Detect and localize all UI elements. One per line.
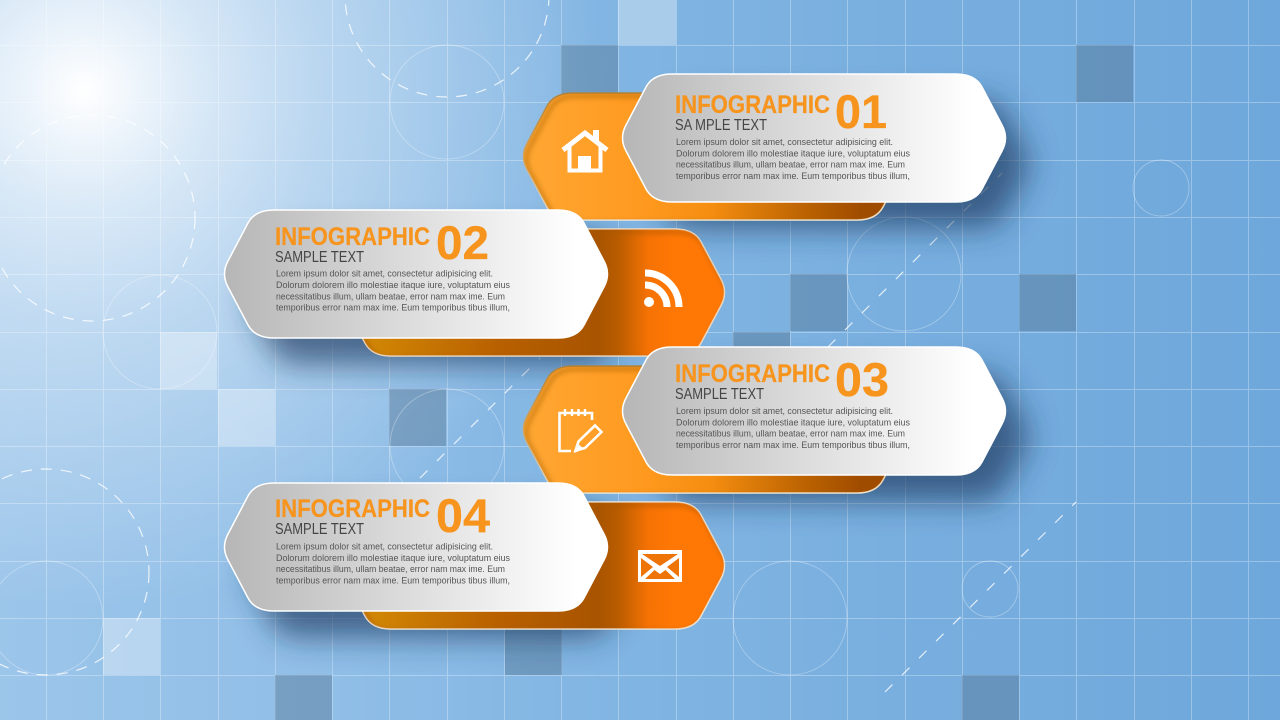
- panel: step 02: [224, 210, 728, 359]
- number 02: 02: [436, 216, 489, 269]
- orange tab 01: [524, 93, 910, 223]
- body text 01: necessitatibus illum, ullam beatae, error nam max ime. Eum: [676, 159, 905, 170]
- panel: step 03: [524, 347, 1006, 496]
- body text 03: temporibus error nam max ime. Eum temporibus tibus illum,: [676, 439, 910, 450]
- body text 03: necessitatibus illum, ullam beatae, error nam max ime. Eum: [676, 428, 905, 439]
- body text 02: Lorem ipsum dolor sit amet, consectetur adipisicing elit.: [276, 268, 493, 279]
- subtitle 04: SAMPLE TEXT: [275, 521, 364, 538]
- body text 02: temporibus error nam max ime. Eum temporibus tibus illum,: [276, 302, 510, 313]
- icon: notepad and pencil: [560, 409, 602, 453]
- white card 03: [622, 347, 1006, 475]
- icon: rss feed: [644, 273, 679, 307]
- subtitle 02: SAMPLE TEXT: [275, 249, 364, 266]
- heading 02: INFOGRAPHIC: [275, 223, 430, 251]
- body text 01: Lorem ipsum dolor sit amet, consectetur adipisicing elit.: [676, 136, 893, 147]
- icon: envelope: [638, 550, 682, 582]
- body text 04: temporibus error nam max ime. Eum temporibus tibus illum,: [276, 574, 510, 586]
- panel: step 04: [224, 483, 728, 632]
- body text 03: Dolorum dolorem illo molestiae itaque iure, voluptatum eius: [676, 416, 910, 427]
- orange tab 03: [524, 366, 910, 496]
- white card 04: [224, 483, 608, 611]
- icon: house: [563, 130, 607, 170]
- card shadows: [250, 100, 1028, 637]
- orange tab 04: [342, 502, 728, 632]
- subtitle 01: SA MPLE TEXT: [675, 117, 767, 134]
- number 01: 01: [835, 85, 887, 138]
- body text 02: necessitatibus illum, ullam beatae, error nam max ime. Eum: [276, 290, 505, 301]
- panel: step 01: [524, 74, 1006, 223]
- body text 02: [276, 268, 510, 313]
- orange tab 02: [342, 229, 728, 359]
- body text 01: temporibus error nam max ime. Eum temporibus tibus illum,: [676, 170, 910, 181]
- body text 03: Lorem ipsum dolor sit amet, consectetur adipisicing elit.: [676, 405, 893, 416]
- body text 04: Lorem ipsum dolor sit amet, consectetur adipisicing elit.: [276, 540, 493, 552]
- heading 04: INFOGRAPHIC: [275, 495, 430, 523]
- body text 04: [276, 540, 510, 586]
- heading 03: INFOGRAPHIC: [675, 360, 830, 388]
- body text 03: [676, 405, 910, 450]
- subtitle 03: SAMPLE TEXT: [675, 386, 764, 403]
- heading 01: INFOGRAPHIC: [675, 91, 830, 119]
- body text 04: Dolorum dolorem illo molestiae itaque iure, voluptatum eius: [276, 552, 510, 563]
- body text 04: necessitatibus illum, ullam beatae, error nam max ime. Eum: [276, 563, 505, 574]
- body text 02: Dolorum dolorem illo molestiae itaque iure, voluptatum eius: [276, 279, 510, 290]
- body text 01: Dolorum dolorem illo molestiae itaque iure, voluptatum eius: [676, 147, 910, 158]
- body text 01: [676, 136, 910, 181]
- white card 02: [224, 210, 608, 338]
- white card 01: [622, 74, 1006, 202]
- number 03: 03: [835, 353, 889, 406]
- number 04: 04: [436, 489, 490, 542]
